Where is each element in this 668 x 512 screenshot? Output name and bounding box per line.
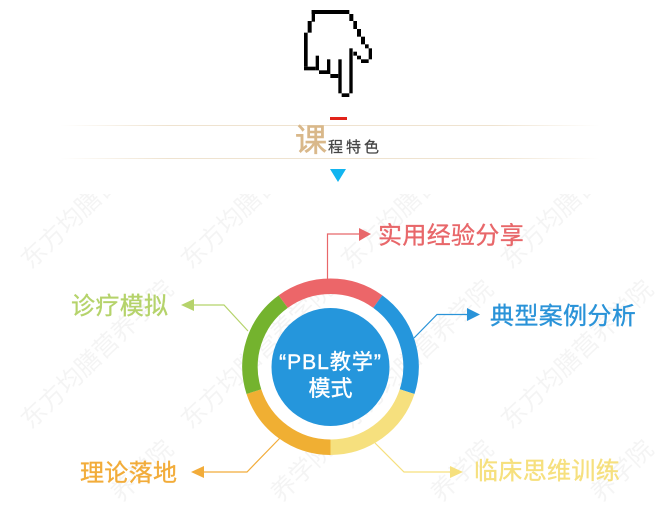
watermark pattern: 养学院 — [106, 435, 179, 507]
connector: yellow arrow — [375, 443, 463, 478]
center circle: PBL model: “PBL教学” — [279, 351, 382, 374]
connector: blue arrow — [414, 308, 480, 338]
label: typical case analysis: 典型案例分析 — [490, 303, 636, 330]
watermark pattern: 东方均膳营养学院 — [16, 115, 179, 274]
connector: orange arrow — [191, 438, 280, 478]
icon: blue down triangle — [330, 169, 346, 182]
label: theory into practice: 理论落地 — [80, 460, 177, 487]
red accent bar — [330, 117, 347, 120]
watermark pattern: 养学院 — [426, 435, 499, 507]
label: practical experience sharing: 实用经验分享 — [378, 222, 524, 250]
watermark pattern — [20, 194, 654, 502]
heading: course features — [60, 122, 600, 159]
watermark pattern: 东方均膳营养学院 — [176, 115, 339, 274]
watermark pattern: 东方均膳营养学院 — [16, 275, 179, 434]
watermark pattern: 东方均膳营养学院 — [496, 275, 659, 434]
icon: pixel hand pointing down — [304, 10, 372, 97]
heading: course features: 程特色 — [328, 139, 382, 156]
ring chart: five segments — [250, 286, 411, 447]
connector: red arrow — [328, 228, 371, 280]
watermark pattern: 养学院 — [586, 435, 659, 507]
watermark pattern: 东方均膳营养学院 — [336, 275, 499, 434]
label: clinical thinking training: 临床思维训练 — [474, 458, 620, 485]
watermark pattern: 养学院 — [266, 435, 339, 507]
heading: course features: 课 — [295, 122, 327, 158]
watermark pattern: 东方均膳营养学院 — [176, 275, 339, 434]
watermark pattern: 东方均膳营养学院 — [496, 115, 659, 274]
center circle: PBL model — [272, 308, 390, 426]
label: diagnosis simulation: 诊疗模拟 — [71, 293, 168, 320]
connector: green arrow — [181, 299, 248, 331]
watermark pattern: 东方均膳营养学院 — [336, 115, 499, 274]
center circle: PBL model: 模式 — [308, 376, 353, 401]
